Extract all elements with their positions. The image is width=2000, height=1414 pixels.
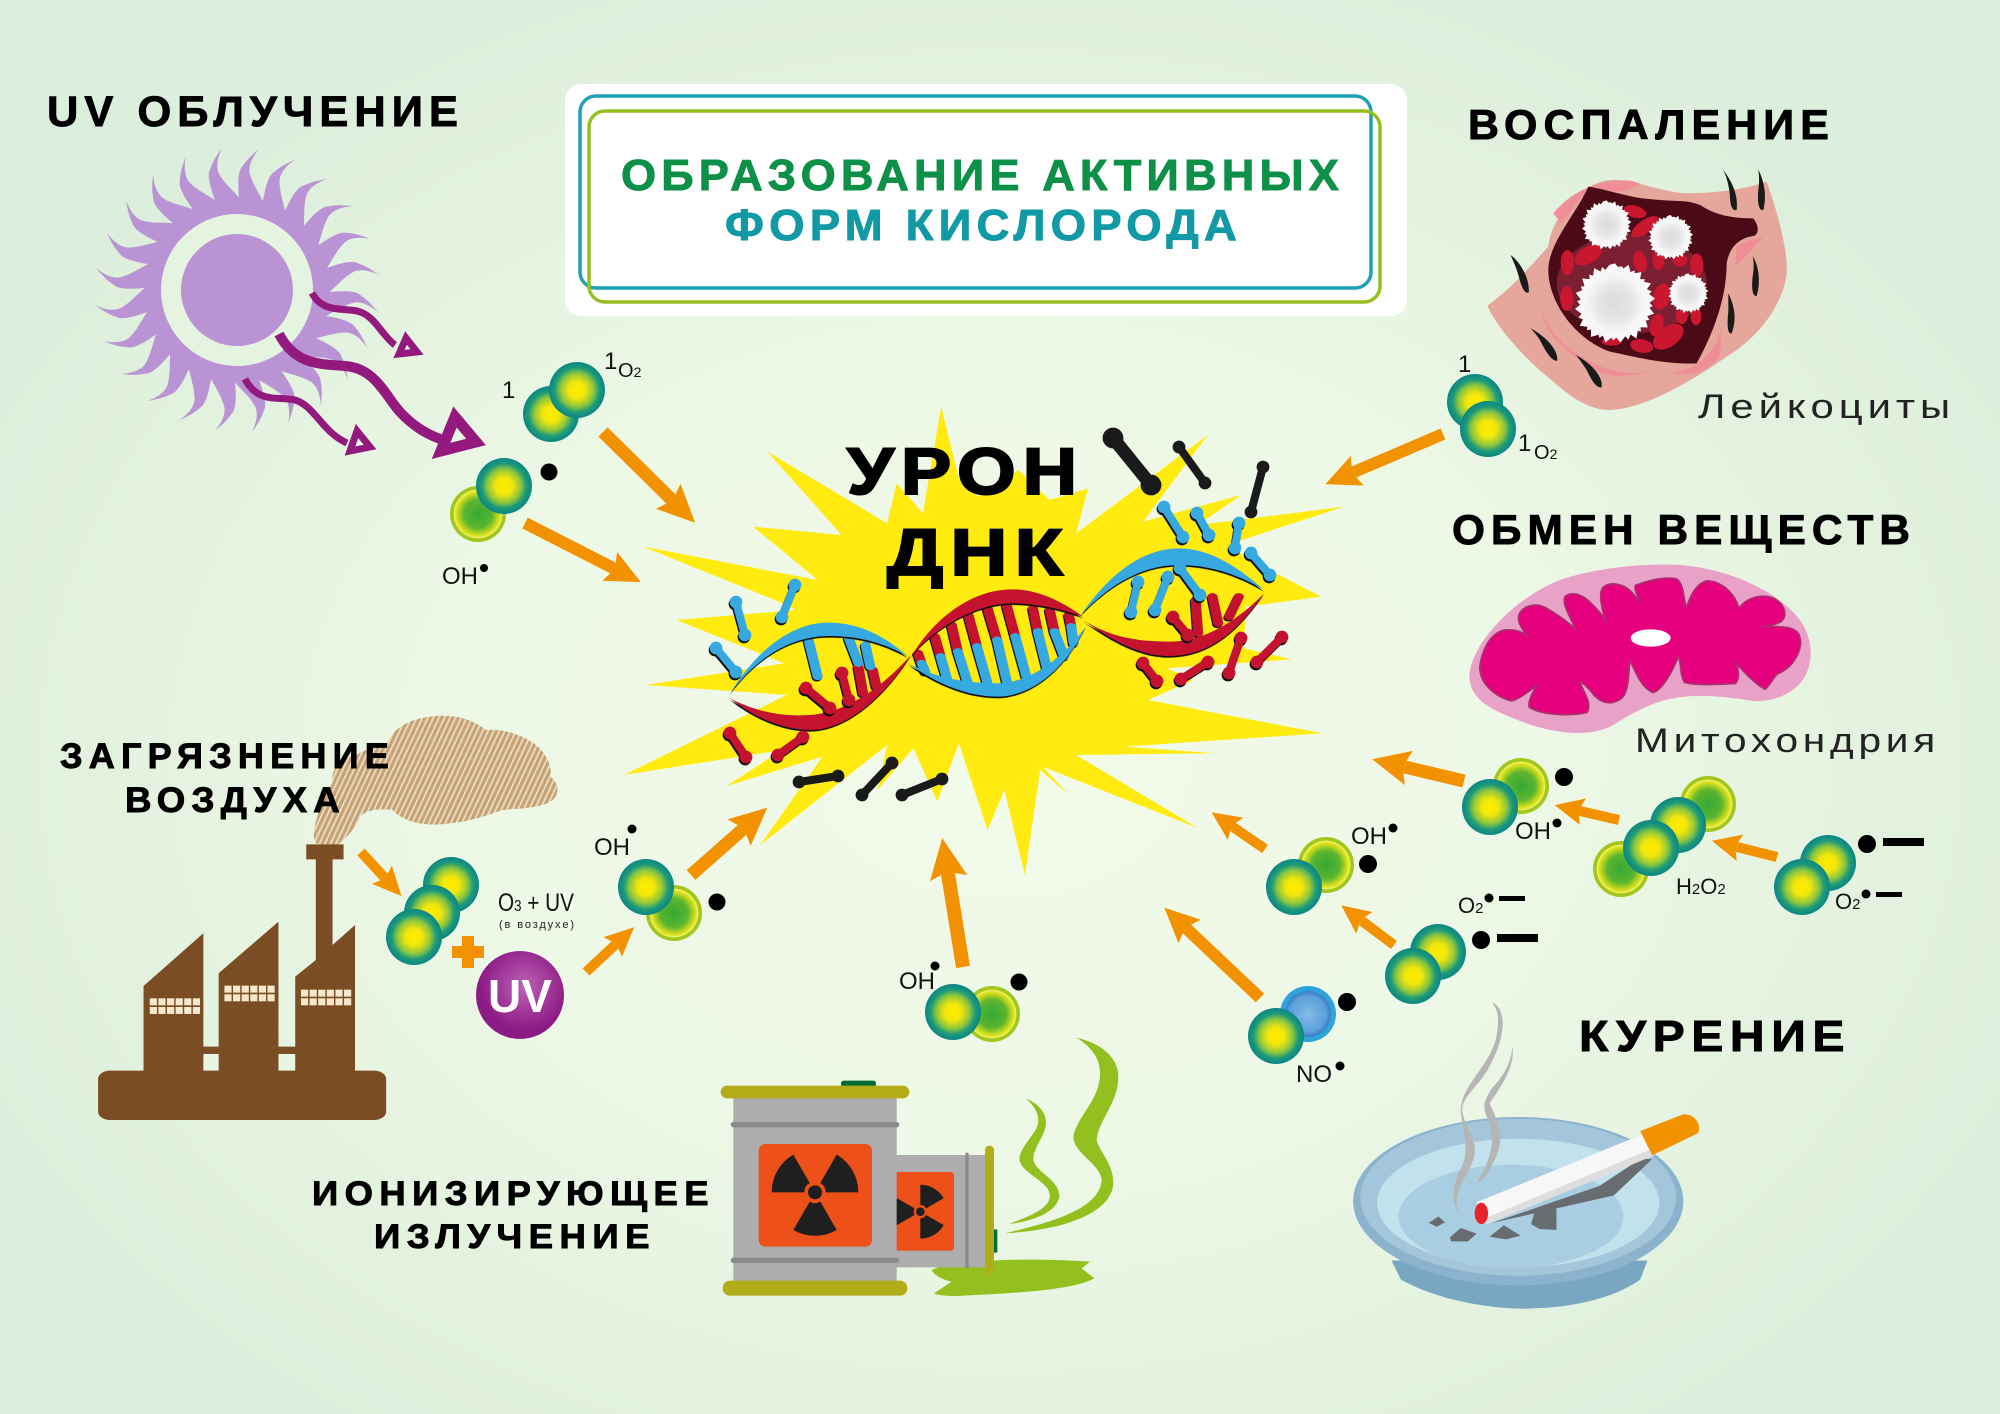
molecule: hydroxyl radical, left [594,824,726,941]
molecule: singlet oxygen, right [1447,351,1558,464]
molecule: hydroxyl radical, center: OH [899,968,935,995]
label: O3 + UV in air [498,889,574,931]
molecule: hydroxyl radical, top left [442,458,558,590]
illustration: radioactive barrels [721,1038,1118,1296]
molecule: superoxide, right: O2 [1835,889,1860,914]
heading: air pollution: ЗАГРЯЗНЕНИЕ [60,737,395,776]
heading: DNA damage: ДНК [887,515,1070,589]
illustration: factory [98,844,386,1120]
arrow [1362,921,1394,945]
molecule: singlet oxygen, top left: 1 [502,377,515,404]
molecule: singlet oxygen, top left [502,348,642,442]
heading: ionizing radiation: ИЗЛУЧЕНИЕ [374,1218,656,1256]
arrow [1233,827,1265,849]
molecule: hydroxyl radical, top left: OH [442,563,478,590]
heading: ionizing radiation [312,1175,715,1256]
illustration: inflamed tissue with leukocytes [1487,169,1787,410]
title panel [565,84,1407,316]
heading: air pollution: ВОЗДУХА [125,781,346,820]
molecule: hydroxyl radical, center [899,962,1028,1042]
heading: inflammation: ВОСПАЛЕНИЕ [1468,101,1835,148]
label: O3 + UV in air: (в воздухе) [499,919,574,931]
arrow [586,945,615,972]
arrow [525,523,613,568]
molecule: nitric oxide [1248,986,1356,1088]
arrow [948,874,963,967]
heading: DNA damage [847,434,1084,589]
molecule: singlet oxygen, right: 1 [1458,351,1471,378]
arrow [1737,847,1777,857]
illustration: ashtray with cigarette [1353,1002,1699,1309]
molecule: superoxide, middle: O2 [1458,893,1483,918]
arrow [1354,434,1443,472]
heading: air pollution [60,737,395,820]
label: leukocytes: Лейкоциты [1698,388,1955,426]
molecule: hydrogen peroxide [1593,776,1736,899]
molecule: hydroxyl radical, middle chain: OH [1351,823,1387,850]
label: mitochondrion: Митохондрия [1635,722,1940,760]
molecule: hydroxyl radical, left: OH [594,834,630,861]
arrow [1405,767,1464,781]
arrow [691,830,742,875]
molecule: hydroxyl radical, middle chain [1266,823,1398,915]
title panel: ОБРАЗОВАНИЕ АКТИВНЫХ [621,151,1344,200]
title panel: ФОРМ КИСЛОРОДА [725,201,1242,250]
icon: plus [452,936,484,968]
molecule: singlet oxygen, right: O2 [1534,442,1558,464]
label: O3 + UV in air: O3 + UV [498,889,574,917]
molecule: superoxide, right [1774,835,1924,915]
arrow [1580,811,1619,820]
arrows: UV waves from the sun [245,293,476,451]
molecule: hydroxyl radical, top of chain [1462,758,1573,845]
molecule: singlet oxygen, top left: O2 [618,360,642,382]
icon: UV sphere [476,951,564,1039]
arrow [1187,929,1260,998]
heading: ionizing radiation: ИОНИЗИРУЮЩЕЕ [312,1175,715,1213]
heading: metabolism: ОБМЕН ВЕЩЕСТВ [1452,506,1916,553]
heading: DNA damage: УРОН [847,434,1084,508]
illustration: mitochondrion [1469,565,1811,733]
molecule: superoxide, middle [1385,893,1538,1004]
molecule: singlet oxygen, right: 1 [1518,430,1531,457]
heading: smoking: КУРЕНИЕ [1579,1012,1851,1061]
molecule: hydrogen peroxide: H2O2 [1676,874,1726,899]
icon: UV sphere: UV [488,970,552,1022]
heading: UV irradiation: UV ОБЛУЧЕНИЕ [47,88,464,136]
icon: violet sun [80,133,394,447]
arrow [603,432,671,499]
smoke cloud [314,716,557,847]
molecule: nitric oxide: NO [1296,1061,1332,1088]
molecule: ozone [386,857,479,965]
molecule: singlet oxygen, top left: 1 [604,348,617,375]
yellow starburst [624,407,1344,875]
arrow [361,852,384,877]
DNA helix [716,438,1282,795]
molecule: hydroxyl radical, top of chain: OH [1515,818,1551,845]
